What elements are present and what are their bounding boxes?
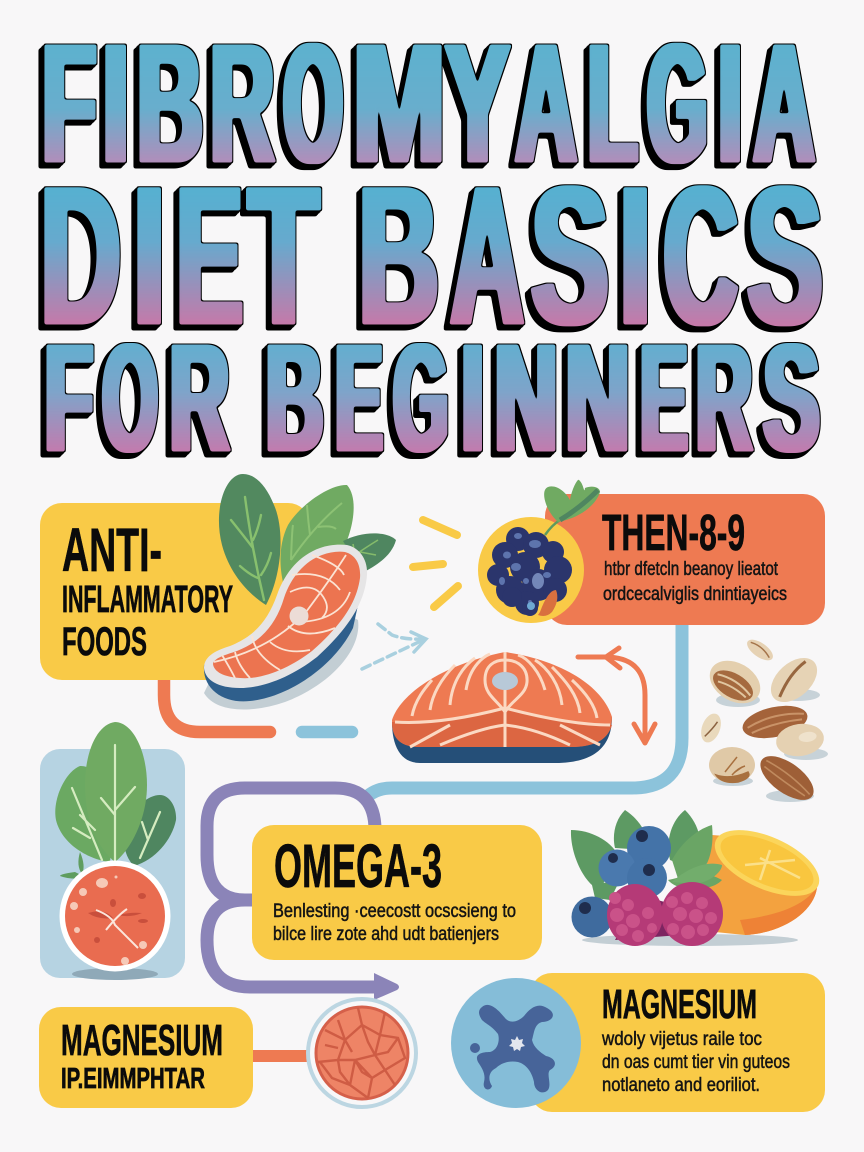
title: A (516, 9, 577, 199)
text: then-8-9 body (603, 559, 787, 605)
text: magnesium body: dn oas cumt tier vin guteos (602, 1052, 790, 1073)
text: magnesium body: notlaneto and eoriliot. (602, 1075, 760, 1096)
illustration: salmon fillet (392, 652, 612, 763)
text: then-8-9 body: htbr dfetcln beanoy lieatot (604, 559, 779, 580)
icon: nuts (697, 636, 828, 808)
arrow: orange curved (578, 648, 655, 743)
title: I (619, 145, 651, 366)
heading: omega-3: OMEGA-3 (274, 832, 442, 900)
title: N (494, 312, 558, 484)
heading: foods: FOODS (62, 620, 147, 664)
heading: then-8-9: THEN-8-9 (602, 504, 745, 561)
connector: blue line from orange box (364, 620, 682, 800)
heading: inflammatory: INFLAMMATORY (62, 579, 233, 621)
connector: orange bar (253, 1050, 309, 1062)
title: E (640, 312, 688, 484)
panel: then-8-9 (545, 494, 825, 625)
title: I (102, 9, 129, 199)
title (40, 9, 823, 484)
icon: salmon steak (204, 545, 367, 709)
panel: leafy greens with tomato (40, 722, 185, 980)
icon: tissue circle (308, 999, 416, 1107)
title: I (133, 145, 165, 366)
title: S (531, 145, 609, 366)
title: I (718, 9, 742, 199)
title: E (335, 312, 382, 484)
icon: leaves behind salmon (219, 474, 396, 605)
connector: orange elbow and blue dash (164, 678, 352, 732)
title: R (696, 312, 752, 484)
text: omega-3 body: bilce lire zote ahd udt batienjers (273, 924, 499, 945)
text: omega-3 body: Benlesting ·ceecostt ocscsieng to (273, 901, 516, 922)
icon: tomato slice (60, 852, 170, 980)
title: F (42, 9, 96, 199)
heading: magnesium: MAGNESIUM (61, 1016, 223, 1065)
title: A (450, 145, 524, 366)
panel: magnesium right (530, 973, 825, 1112)
text: magnesium body: wdoly vijetus raile toc (601, 1029, 762, 1050)
title: E (176, 145, 243, 366)
icon: blueberries in yellow circle (478, 480, 600, 623)
panel: omega-3 (252, 825, 542, 960)
text: magnesium body (601, 1029, 790, 1096)
title: C (663, 145, 738, 366)
title: N (565, 312, 630, 484)
title: O (102, 312, 158, 484)
title: B (137, 9, 203, 199)
title: I (461, 312, 484, 484)
title: D (40, 145, 121, 366)
icon: yellow rays (413, 520, 458, 607)
panel: anti-inflammatory foods (40, 503, 310, 680)
title: B (358, 145, 439, 366)
connector: purple looping arrow (207, 788, 399, 1000)
title: S (763, 312, 820, 484)
icon: berries and orange (571, 810, 829, 946)
title: L (588, 9, 638, 199)
title: Y (446, 9, 510, 199)
title: F (45, 312, 93, 484)
heading: anti-: ANTI- (62, 516, 162, 584)
title: R (170, 312, 229, 484)
text: then-8-9 body: ordcecalviglis dnintiayeics (603, 584, 787, 605)
panel: magnesium left (39, 1007, 253, 1108)
title: G (647, 9, 708, 199)
icon: dashed arrow (362, 624, 426, 669)
text: omega-3 body (273, 901, 516, 945)
title: M (353, 9, 446, 199)
title: O (283, 9, 343, 199)
heading: magnesium: MAGNESIUM (602, 981, 757, 1027)
title: R (210, 9, 274, 199)
icon: spinach leaves (55, 722, 176, 866)
title: G (393, 312, 448, 484)
text: magnesium sub: IP.EIMMPHTAR (61, 1063, 205, 1095)
title: B (266, 312, 323, 484)
icon: molecule circle (451, 978, 581, 1108)
title: T (248, 145, 319, 366)
